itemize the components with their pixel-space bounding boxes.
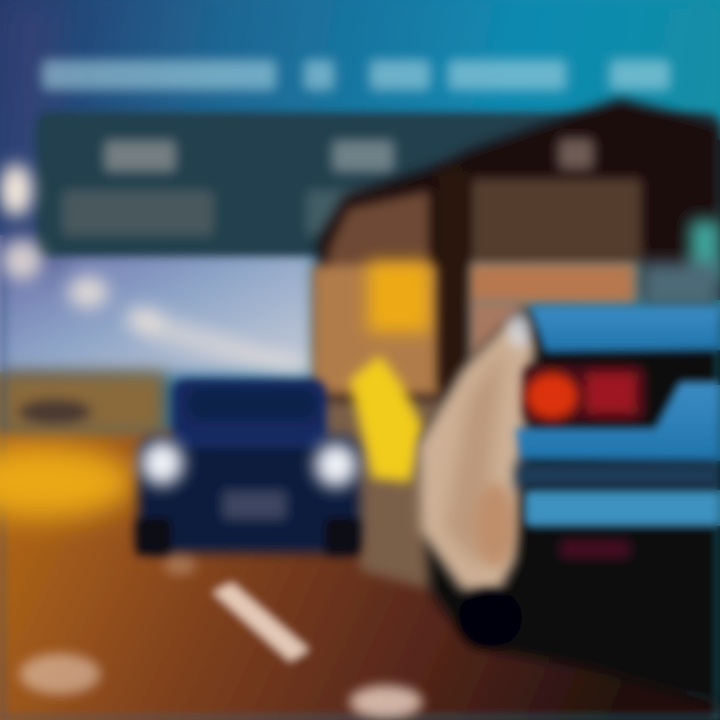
centre panel text	[306, 190, 396, 236]
yellow figure	[350, 355, 424, 482]
wall below yellow figure	[320, 380, 470, 600]
licence plate	[222, 490, 287, 520]
car side panel	[418, 318, 535, 590]
left panel heading	[104, 140, 176, 172]
tail light	[522, 364, 647, 422]
car roof	[530, 306, 720, 352]
road	[0, 372, 720, 720]
street lights	[0, 164, 305, 378]
car body	[515, 382, 720, 462]
dark blue car	[135, 378, 361, 556]
headlights	[141, 441, 357, 487]
building	[312, 98, 720, 600]
blue car foreground	[418, 306, 720, 705]
wheel	[458, 588, 522, 648]
left panel text	[62, 190, 214, 236]
road markings	[20, 555, 422, 718]
headline title bar	[42, 60, 670, 90]
dark info panel	[36, 112, 720, 257]
centre panel heading	[332, 140, 394, 172]
